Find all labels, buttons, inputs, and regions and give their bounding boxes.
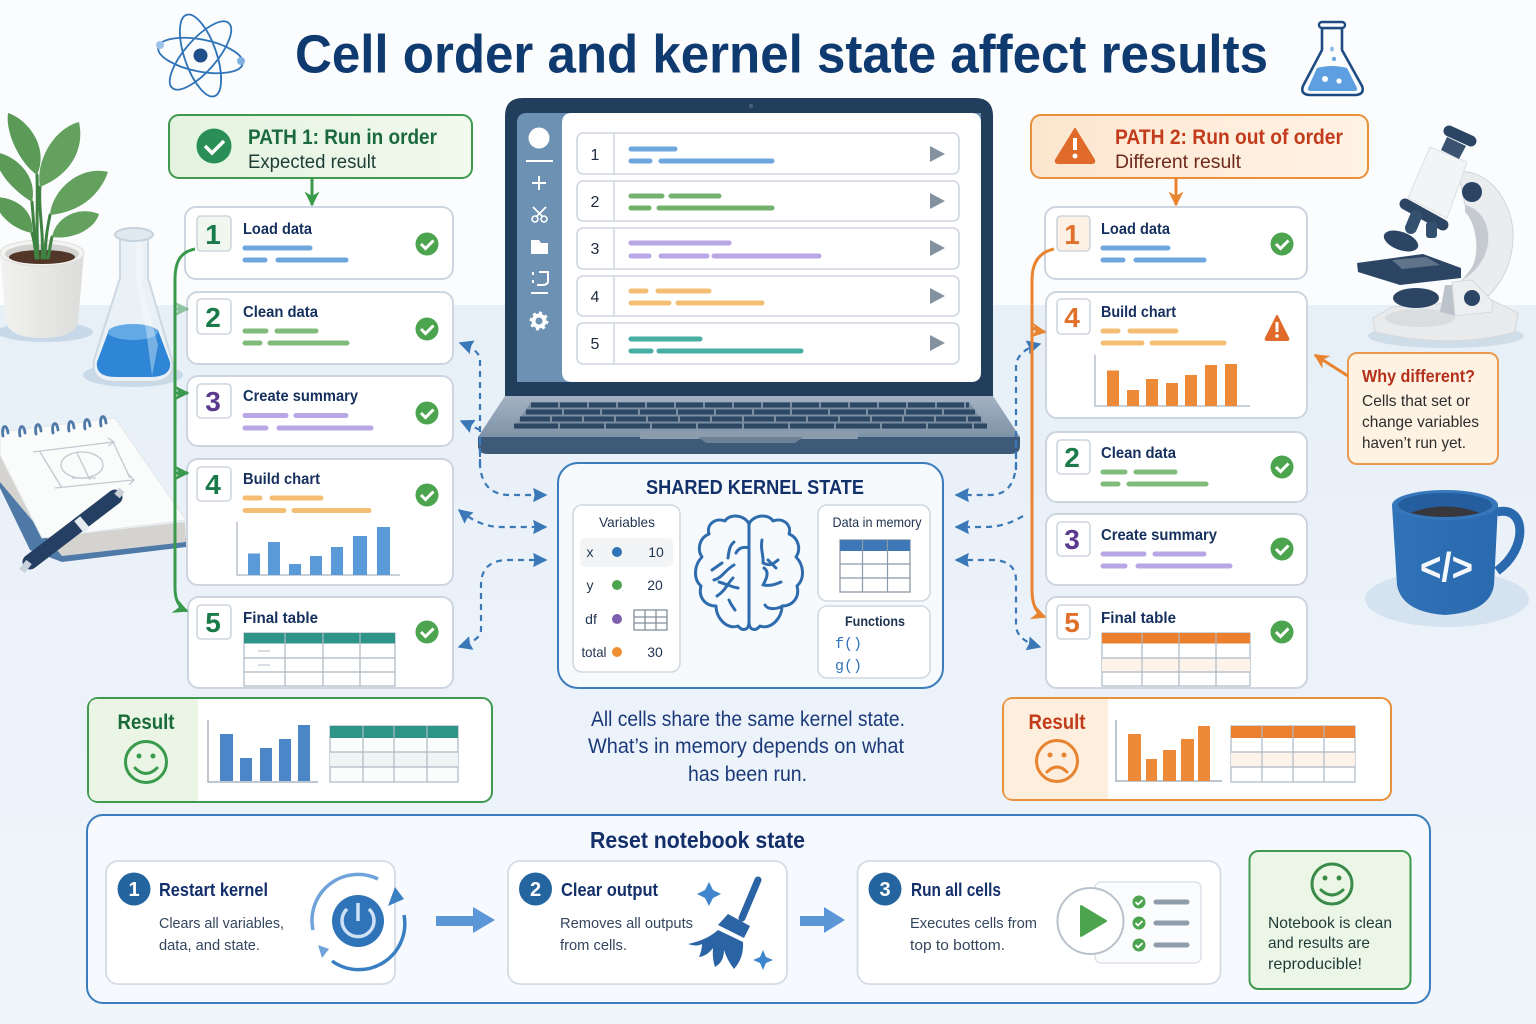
icon: lab flask — [1302, 22, 1363, 95]
callout: why different — [1348, 353, 1498, 464]
callout: why different: Why different? — [1362, 366, 1475, 386]
panel: path 1 card 2 clean data: Clean data — [243, 304, 318, 321]
panel: functions: f() — [835, 636, 862, 653]
panel: path 2 result: Result — [1028, 711, 1086, 734]
panel: path 1 card 4 build chart — [187, 459, 453, 585]
callout: why different: change variables — [1362, 414, 1479, 431]
notebook cell 4: 4 — [591, 289, 600, 306]
panel: path 2 card 1 load data — [1045, 207, 1307, 279]
step 2: clear output: from cells. — [560, 937, 627, 954]
notebook cell 5: 5 — [591, 336, 600, 353]
panel: shared kernel state — [558, 463, 943, 688]
illustration: microscope — [1357, 131, 1524, 348]
step 1: restart kernel: data, and state. — [159, 937, 260, 954]
panel: path 2 card 2 clean data: 2 — [1064, 442, 1080, 473]
illustration: blue code mug — [1365, 490, 1529, 627]
panel: path 1 card 3 create summary — [187, 376, 453, 446]
panel: path 1 card 5 final table: Final table — [243, 610, 318, 627]
text block: kernel explanation: has been run. — [688, 763, 807, 786]
panel: path 1 result: Result — [118, 711, 174, 734]
icon: green check — [196, 128, 232, 164]
panel: path 1 header: PATH 1: Run in order — [248, 126, 437, 149]
notebook cell 5 — [577, 323, 959, 364]
step 1: restart kernel: Clears all variables, — [159, 915, 284, 932]
panel: path 2 card 3 create summary — [1046, 514, 1307, 585]
step 2: clear output — [508, 861, 787, 984]
laptop — [478, 98, 1020, 454]
icon: smiley — [126, 742, 166, 782]
panel: data in memory: Data in memory — [832, 514, 922, 530]
text block: kernel explanation: All cells share the same kernel state. — [591, 708, 905, 731]
arrow: path 2 to first cell — [1174, 178, 1178, 205]
icon: warning triangle — [1056, 129, 1094, 163]
panel: path 2 header — [1031, 115, 1368, 178]
panel: path 1 header — [169, 115, 472, 178]
panel: path 1 header: Expected result — [248, 152, 377, 173]
text block: kernel explanation: What’s in memory depends on what — [588, 735, 904, 758]
variables table: 20 — [647, 577, 663, 593]
variables table: df — [585, 611, 597, 627]
text block: kernel explanation — [588, 708, 905, 786]
icon: frowning face — [1036, 740, 1078, 782]
panel: path 2 card 5 final table — [1046, 597, 1307, 688]
callout: notebook clean: Notebook is clean — [1268, 915, 1392, 932]
notebook cell 3: 3 — [591, 241, 600, 258]
callout: notebook clean: and results are — [1268, 935, 1370, 952]
arrow: path 1 sequential flow line — [175, 249, 195, 611]
notebook sidebar icons — [526, 128, 553, 329]
arrow: step 2 to step 3 — [800, 907, 845, 933]
panel: path 2 card 4 build chart: 4 — [1064, 302, 1080, 333]
panel: path 1 card 1 load data: 1 — [205, 219, 221, 250]
arrow: step 1 to step 2 — [436, 907, 495, 933]
panel: path 1 card 1 load data — [185, 207, 453, 279]
callout: why different: Cells that set or — [1362, 393, 1471, 410]
step 3: run all cells: top to bottom. — [910, 937, 1005, 954]
panel: path 2 card 4 build chart: Build chart — [1101, 304, 1177, 321]
table: result teal — [330, 726, 458, 782]
callout: notebook clean: reproducible! — [1268, 956, 1362, 973]
panel: path 2 card 2 clean data: Clean data — [1101, 445, 1176, 462]
notebook cell 3 — [577, 228, 959, 269]
bar chart: blue bars — [237, 522, 400, 575]
illustration: potted plant — [0, 113, 108, 342]
arrow: path 2 out-of-order flow line — [1032, 249, 1054, 617]
panel: path 1 card 1 load data: Load data — [243, 221, 312, 238]
step 2: clear output: Clear output — [561, 880, 658, 900]
step 2: clear output: 2 — [530, 879, 541, 901]
variables table: total — [582, 644, 606, 660]
panel: path 2 card 3 create summary: Create summary — [1101, 527, 1217, 544]
arrow: callout to build chart — [1315, 355, 1348, 376]
bar chart: result orange — [1116, 720, 1222, 781]
panel: path 2 card 1 load data: 1 — [1064, 219, 1080, 250]
icon: play button — [1058, 888, 1124, 954]
title: Cell order and kernel state affect results — [295, 24, 1268, 84]
icon: smiley — [1312, 864, 1352, 904]
panel: path 2 card 1 load data: Load data — [1101, 221, 1170, 238]
panel: path 1 card 2 clean data: 2 — [205, 302, 221, 333]
variables table: x — [586, 544, 594, 560]
icon: checklist card — [1095, 882, 1201, 963]
panel: path 1 card 4 build chart: Build chart — [243, 471, 321, 488]
variables table — [573, 505, 680, 672]
notebook cell 2: 2 — [591, 194, 600, 211]
panel: path 2 card 5 final table: Final table — [1101, 610, 1176, 627]
panel: functions: g() — [835, 658, 862, 675]
panel: path 1 card 5 final table: 5 — [205, 607, 221, 638]
panel: path 1 result — [88, 698, 492, 802]
callout: notebook clean — [1250, 851, 1410, 989]
laptop base and keyboard — [478, 396, 1020, 454]
step 1: restart kernel — [106, 861, 405, 984]
step 3: run all cells: Run all cells — [911, 880, 1001, 900]
arrows: dashed links between path 2 cells and kernel — [956, 344, 1040, 647]
panel: path 1 card 2 clean data — [187, 292, 453, 364]
panel: path 2 card 4 build chart — [1046, 292, 1307, 418]
icon: warning — [1266, 316, 1288, 340]
variables table: 30 — [647, 644, 663, 660]
panel: path 1 card 5 final table — [188, 597, 453, 688]
step 1: restart kernel: Restart kernel — [159, 880, 268, 900]
step 2: clear output: Removes all outputs — [560, 915, 693, 932]
laptop lid and screen — [505, 98, 993, 396]
panel: path 2 header: Different result — [1115, 152, 1242, 173]
table: result orange — [1231, 726, 1355, 782]
variables table: Variables — [599, 514, 655, 530]
panel: path 2 card 3 create summary: 3 — [1064, 524, 1080, 555]
panel: path 2 card 2 clean data — [1046, 432, 1307, 502]
step 1: restart kernel: 1 — [128, 879, 140, 901]
icon: brain — [695, 516, 803, 629]
panel: data in memory — [818, 505, 930, 601]
panel: path 1 card 4 build chart: 4 — [205, 469, 221, 500]
panel: path 1 card 3 create summary: 3 — [205, 386, 221, 417]
panel: path 2 result — [1003, 698, 1391, 800]
panel: path 2 card 5 final table: 5 — [1064, 607, 1080, 638]
arrows: dashed links between path 1 cells and kernel — [459, 343, 546, 647]
panel: path 1 card 3 create summary: Create summary — [243, 388, 358, 405]
panel: reset notebook state: Reset notebook state — [590, 827, 805, 853]
bar chart: orange bars — [1095, 354, 1250, 406]
illustration: conical flask with blue liquid — [83, 228, 183, 387]
panel: functions: Functions — [845, 613, 905, 629]
table: teal header — [244, 633, 395, 686]
arrow: path 1 to first cell — [310, 178, 314, 205]
callout: why different: haven’t run yet. — [1362, 435, 1466, 452]
notebook cell 1 — [577, 133, 959, 174]
icon: broom with sparkles — [688, 880, 773, 970]
icon: power with refresh ring — [312, 874, 405, 970]
notebook cell 2 — [577, 181, 959, 221]
icon: atom — [155, 10, 246, 101]
panel: shared kernel state: SHARED KERNEL STATE — [646, 477, 864, 499]
panel: functions — [818, 606, 930, 678]
step 3: run all cells: Executes cells from — [910, 915, 1037, 932]
illustration: blue code mug: </> — [1420, 544, 1473, 590]
panel: path 2 header: PATH 2: Run out of order — [1115, 126, 1343, 149]
step 3: run all cells: 3 — [879, 879, 891, 901]
table: orange header — [1102, 633, 1250, 686]
notebook cell 1: 1 — [591, 147, 600, 164]
bar chart: result blue — [208, 720, 318, 782]
variables table: y — [586, 577, 594, 593]
step 3: run all cells — [858, 861, 1220, 984]
illustration: spiral notebook and pen — [0, 417, 186, 571]
panel: reset notebook state — [87, 815, 1430, 1003]
variables table: 10 — [648, 544, 664, 560]
notebook cell 4 — [577, 276, 959, 316]
